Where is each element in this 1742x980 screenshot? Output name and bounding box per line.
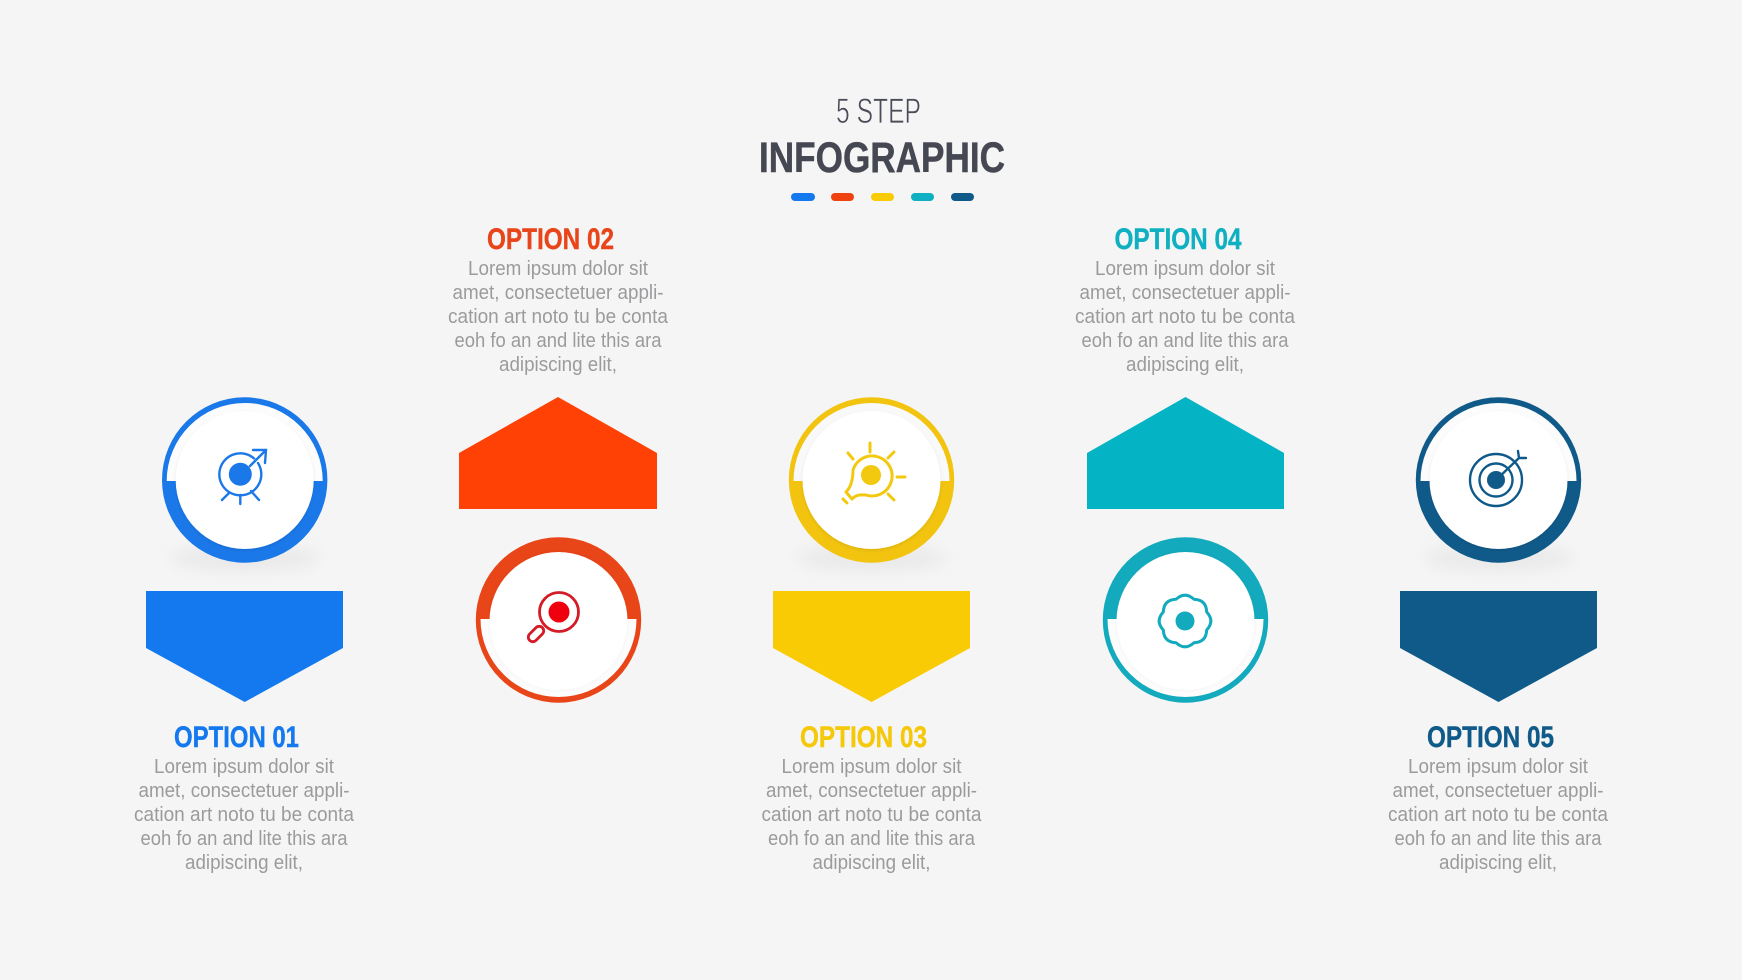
heading: option 05: OPTION 05 bbox=[1427, 721, 1554, 754]
text block: option 01: adipiscing elit, bbox=[185, 852, 303, 874]
text block: option 02: cation art noto tu be conta bbox=[448, 306, 669, 328]
heading: option 03: OPTION 03 bbox=[800, 721, 927, 754]
text block: option 05: cation art noto tu be conta bbox=[1388, 804, 1609, 826]
arrow: option 03 bbox=[773, 591, 970, 702]
panel: option 02 bbox=[448, 223, 669, 703]
text block: option 05: adipiscing elit, bbox=[1439, 852, 1557, 874]
text block: option 04: Lorem ipsum dolor sit bbox=[1095, 258, 1275, 280]
arrow: option 04 bbox=[1087, 397, 1284, 509]
circle badge: option 05 bbox=[1416, 397, 1581, 572]
icon: target with dart bbox=[1470, 451, 1526, 506]
text block: option 01: cation art noto tu be conta bbox=[134, 804, 355, 826]
heading: option 02: OPTION 02 bbox=[487, 223, 614, 256]
panel: option 04 bbox=[1075, 223, 1296, 703]
circle badge: option 04 bbox=[1103, 537, 1268, 703]
text block: option 03: adipiscing elit, bbox=[812, 852, 930, 874]
colour legend dashes bbox=[791, 193, 974, 201]
text block: option 02: eoh fo an and lite this ara bbox=[454, 330, 662, 352]
text block: option 01: Lorem ipsum dolor sit bbox=[154, 756, 334, 778]
text block: option 03: amet, consectetuer appli- bbox=[766, 780, 977, 802]
text block: option 04: eoh fo an and lite this ara bbox=[1082, 330, 1289, 352]
icon: gear bbox=[1159, 595, 1211, 647]
text block: option 05: amet, consectetuer appli- bbox=[1392, 780, 1604, 802]
text block: option 02: Lorem ipsum dolor sit bbox=[468, 258, 648, 280]
panel: option 01 bbox=[134, 397, 355, 874]
text block: option 03: Lorem ipsum dolor sit bbox=[782, 756, 962, 778]
heading: option 04: OPTION 04 bbox=[1114, 223, 1242, 256]
title line: INFOGRAPHIC: INFOGRAPHIC bbox=[759, 134, 1005, 182]
title bbox=[759, 92, 1005, 182]
heading: option 01: OPTION 01 bbox=[174, 721, 299, 754]
circle badge: option 02 bbox=[476, 537, 641, 703]
text block: option 04: amet, consectetuer appli- bbox=[1080, 282, 1290, 304]
text block: option 03 bbox=[762, 756, 982, 874]
text block: option 03: eoh fo an and lite this ara bbox=[768, 828, 976, 850]
text block: option 05: eoh fo an and lite this ara bbox=[1394, 828, 1602, 850]
text block: option 02: amet, consectetuer appli- bbox=[452, 282, 664, 304]
icon: target with arrow bbox=[219, 450, 266, 504]
icon: light bulb bbox=[843, 443, 905, 503]
panel: option 05 bbox=[1388, 397, 1609, 874]
text block: option 04 bbox=[1075, 258, 1296, 376]
panel: option 03 bbox=[762, 397, 982, 874]
text block: option 01 bbox=[134, 756, 355, 874]
text block: option 02 bbox=[448, 258, 669, 376]
text block: option 04: adipiscing elit, bbox=[1126, 354, 1244, 376]
text block: option 02: adipiscing elit, bbox=[499, 354, 617, 376]
text block: option 03: cation art noto tu be conta bbox=[762, 804, 982, 826]
text block: option 01: eoh fo an and lite this ara bbox=[140, 828, 348, 850]
arrow: option 02 bbox=[459, 397, 657, 509]
text block: option 04: cation art noto tu be conta bbox=[1075, 306, 1296, 328]
arrow: option 05 bbox=[1400, 591, 1597, 702]
arrow: option 01 bbox=[146, 591, 343, 702]
text block: option 05 bbox=[1388, 756, 1609, 874]
text block: option 05: Lorem ipsum dolor sit bbox=[1408, 756, 1588, 778]
title line: 5 STEP: 5 STEP bbox=[836, 92, 921, 131]
text block: option 01: amet, consectetuer appli- bbox=[138, 780, 350, 802]
circle badge: option 03 bbox=[789, 397, 954, 572]
circle badge: option 01 bbox=[162, 397, 327, 572]
icon: magnifier bbox=[526, 592, 578, 644]
